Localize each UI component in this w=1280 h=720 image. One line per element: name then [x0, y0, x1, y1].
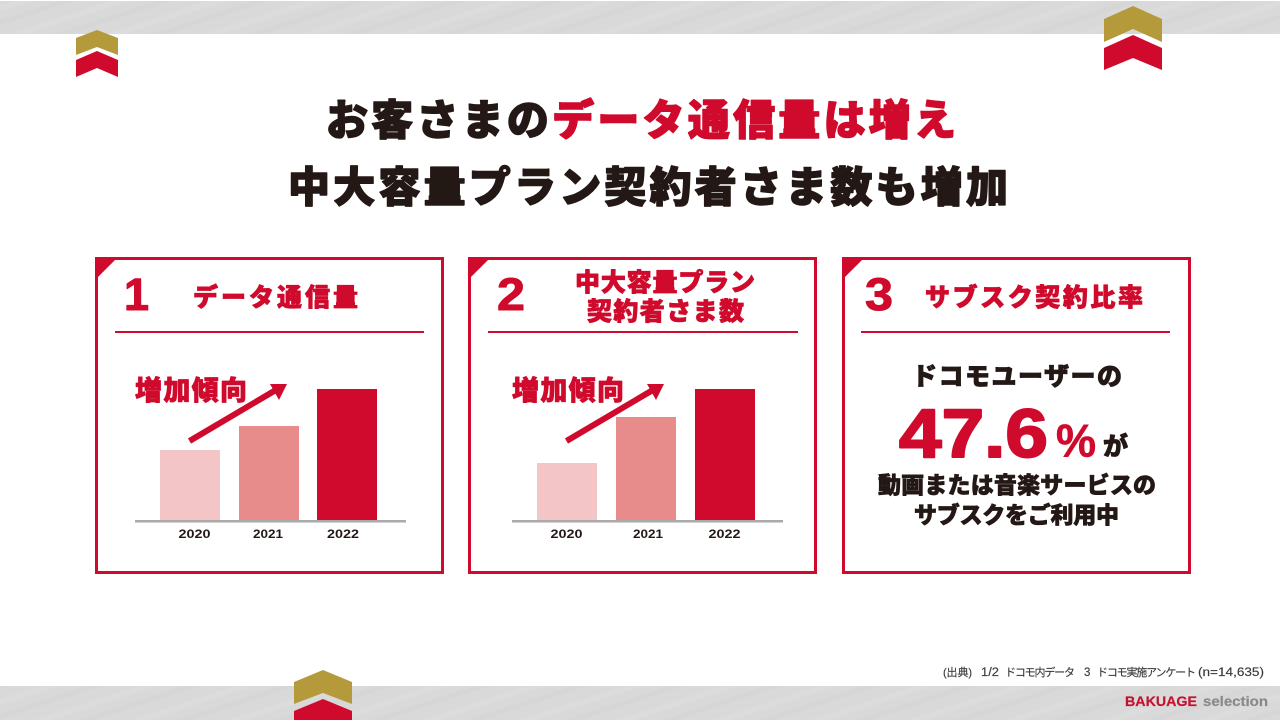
- panel 3 description: サブスクをご利用中: [914, 502, 1119, 528]
- top grey band: [0, 1, 1280, 34]
- panel 1 bar chart: 2021: [253, 527, 283, 541]
- panel 1 heading: データ通信量: [193, 283, 358, 312]
- icon: chevrons bottom: [294, 670, 352, 720]
- brand label: [1125, 693, 1268, 709]
- panel 2 bar chart: [512, 389, 783, 541]
- panel 3: subscription ratio: [842, 257, 1190, 572]
- icon: large chevrons top right: [1104, 6, 1162, 70]
- panel 1 bar chart: 2020: [178, 527, 211, 541]
- title: お客さまのデータ通信量は増え: [326, 97, 956, 144]
- source note: 3: [1084, 667, 1090, 679]
- panel 3 big stat: %: [1056, 414, 1096, 466]
- panel 2: mid and large plan subscribers: [468, 257, 816, 572]
- panel 2 trend label: 増加傾向: [512, 376, 624, 406]
- title: 中大容量プラン契約者さま数も増加: [288, 164, 1008, 211]
- panel 2 heading: 中大容量プラン: [575, 269, 755, 297]
- arrow: panel 2 upward trend: [566, 384, 664, 441]
- panel 1 bar chart: [135, 389, 406, 541]
- source note: (n=14,635): [1198, 667, 1264, 679]
- panel 1 bar chart: 2022: [327, 527, 359, 541]
- panel 2 number: 2: [497, 269, 525, 320]
- source note: 1/2: [981, 667, 999, 679]
- panel 3 big stat: [899, 395, 1128, 472]
- brand label: selection: [1203, 693, 1268, 709]
- panel 3 big stat: が: [1103, 432, 1128, 461]
- brand label: BAKUAGE: [1125, 693, 1197, 709]
- source note: (出典): [943, 665, 972, 679]
- panel 2 heading: [575, 269, 755, 326]
- panel 3 description: [878, 472, 1156, 528]
- panel 1 trend label: 増加傾向: [135, 376, 247, 406]
- panel 3 number: 3: [865, 269, 893, 320]
- panel 1 number: 1: [124, 269, 149, 320]
- source note: [943, 665, 1264, 679]
- source note: ドコモ実施アンケート: [1097, 666, 1196, 679]
- panel 1: data traffic: [95, 257, 442, 572]
- panel 2 bar chart: 2021: [633, 527, 663, 541]
- panel 3 description: 動画または音楽サービスの: [878, 472, 1156, 498]
- panel 3 lead text: ドコモユーザーの: [912, 363, 1122, 391]
- panel 2 heading: 契約者さま数: [587, 298, 744, 326]
- panel 3 big stat: 47.6: [899, 395, 1048, 472]
- panel 2 bar chart: 2020: [550, 527, 583, 541]
- panel 3 heading: サブスク契約比率: [925, 283, 1143, 312]
- source note: ドコモ内データ: [1005, 665, 1075, 679]
- panel 2 bar chart: 2022: [708, 527, 741, 541]
- icon: small chevrons top left: [76, 30, 118, 77]
- title: [288, 97, 1008, 211]
- arrow: panel 1 upward trend: [190, 384, 287, 441]
- bottom grey band: [0, 686, 1280, 720]
